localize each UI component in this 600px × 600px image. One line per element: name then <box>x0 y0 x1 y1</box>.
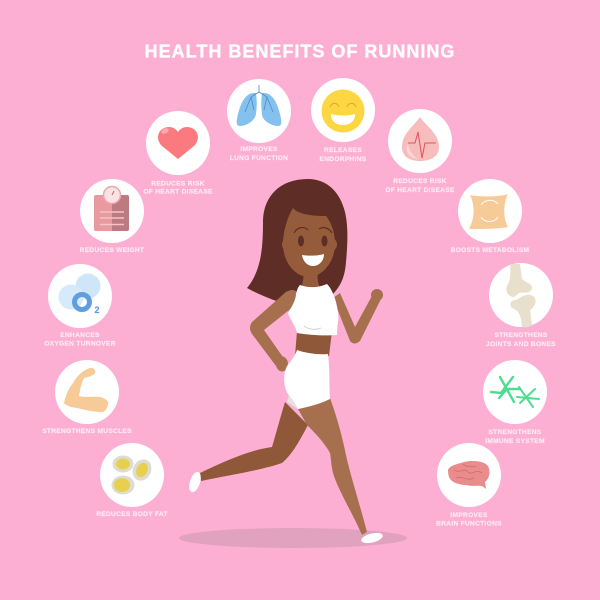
item: strengthens joints and bones (bones): STRENGTHENS <box>494 332 548 339</box>
top fold <box>304 326 321 329</box>
item: improves brain functions (brain): IMPROVES <box>450 512 488 519</box>
item: reduces body fat (fat cells): REDUCES BODY FAT <box>96 511 168 518</box>
title: HEALTH BENEFITS OF RUNNING <box>145 42 455 62</box>
item: enhances oxygen turnover (O2) <box>44 264 116 348</box>
shorts back <box>287 390 305 409</box>
item: strengthens joints and bones (bones): JOINTS AND BONES <box>486 341 556 348</box>
item: strengthens immune system (cells): IMMUNE SYSTEM <box>485 438 545 445</box>
hand on hip <box>276 356 288 372</box>
eyebrows <box>294 228 332 233</box>
shorts <box>284 350 330 409</box>
item: reduces risk of heart disease (heart) <box>143 111 213 196</box>
item: reduces risk of heart disease (heart): OF HEART DISEASE <box>143 188 213 196</box>
midriff <box>295 331 332 356</box>
item: enhances oxygen turnover (O2): ENHANCES <box>60 332 100 339</box>
eyes <box>298 236 328 246</box>
rear leg <box>200 402 308 481</box>
ears <box>282 238 337 251</box>
item: improves brain functions (brain) <box>436 443 502 528</box>
item: strengthening muscles (arm) <box>42 360 132 435</box>
hair <box>247 179 347 303</box>
item: strengthening muscles (arm): STRENGTHENS MUSCLES <box>42 428 132 435</box>
item: reduces risk of heart disease (heart): REDUCES RISK <box>151 180 205 188</box>
ground shadow <box>179 528 407 548</box>
item: improves lung function (lungs): LUNG FUNCTION <box>230 155 288 162</box>
rear shoe <box>187 470 203 494</box>
item: boosts metabolism (waist) <box>451 179 530 254</box>
item: releases endorphins (smile): ENDORPHINS <box>320 156 367 163</box>
item: enhances oxygen turnover (O2): 2 <box>94 305 100 315</box>
right arm <box>333 293 381 344</box>
smile <box>302 254 324 266</box>
left arm <box>250 291 298 366</box>
item: strengthens joints and bones (bones) <box>486 263 556 348</box>
item: reduces weight (scale) <box>80 179 144 254</box>
item: reduces weight (scale): REDUCES WEIGHT <box>80 247 144 254</box>
front leg <box>298 398 367 535</box>
item: releases endorphins (smile): RELEASES <box>324 147 362 154</box>
item: reduces risk of heart disease (blood drop) <box>385 109 455 194</box>
face <box>283 208 335 277</box>
item: strengthens immune system (cells): STRENGTHENS <box>488 429 542 436</box>
item: releases endorphins (smile) <box>311 78 375 163</box>
item: improves lung function (lungs) <box>227 79 291 162</box>
item: improves brain functions (brain): BRAIN FUNCTIONS <box>436 520 502 528</box>
item: improves lung function (lungs): IMPROVES <box>240 146 278 153</box>
fist <box>371 289 383 301</box>
item: reduces risk of heart disease (blood drop): REDUCES RISK <box>393 178 447 185</box>
crop top <box>288 284 338 335</box>
item: reduces risk of heart disease (blood drop): OF HEART DISEASE <box>385 187 455 194</box>
item: boosts metabolism (waist): BOOSTS METABOLISM <box>451 247 530 254</box>
item: reduces body fat (fat cells) <box>96 443 168 518</box>
left shoulder <box>285 290 299 304</box>
item: enhances oxygen turnover (O2): OXYGEN TURNOVER <box>44 340 116 348</box>
item: strengthens immune system (cells) <box>483 360 547 445</box>
runner figure <box>187 179 384 545</box>
neck <box>301 272 320 288</box>
front shoe <box>360 531 384 545</box>
